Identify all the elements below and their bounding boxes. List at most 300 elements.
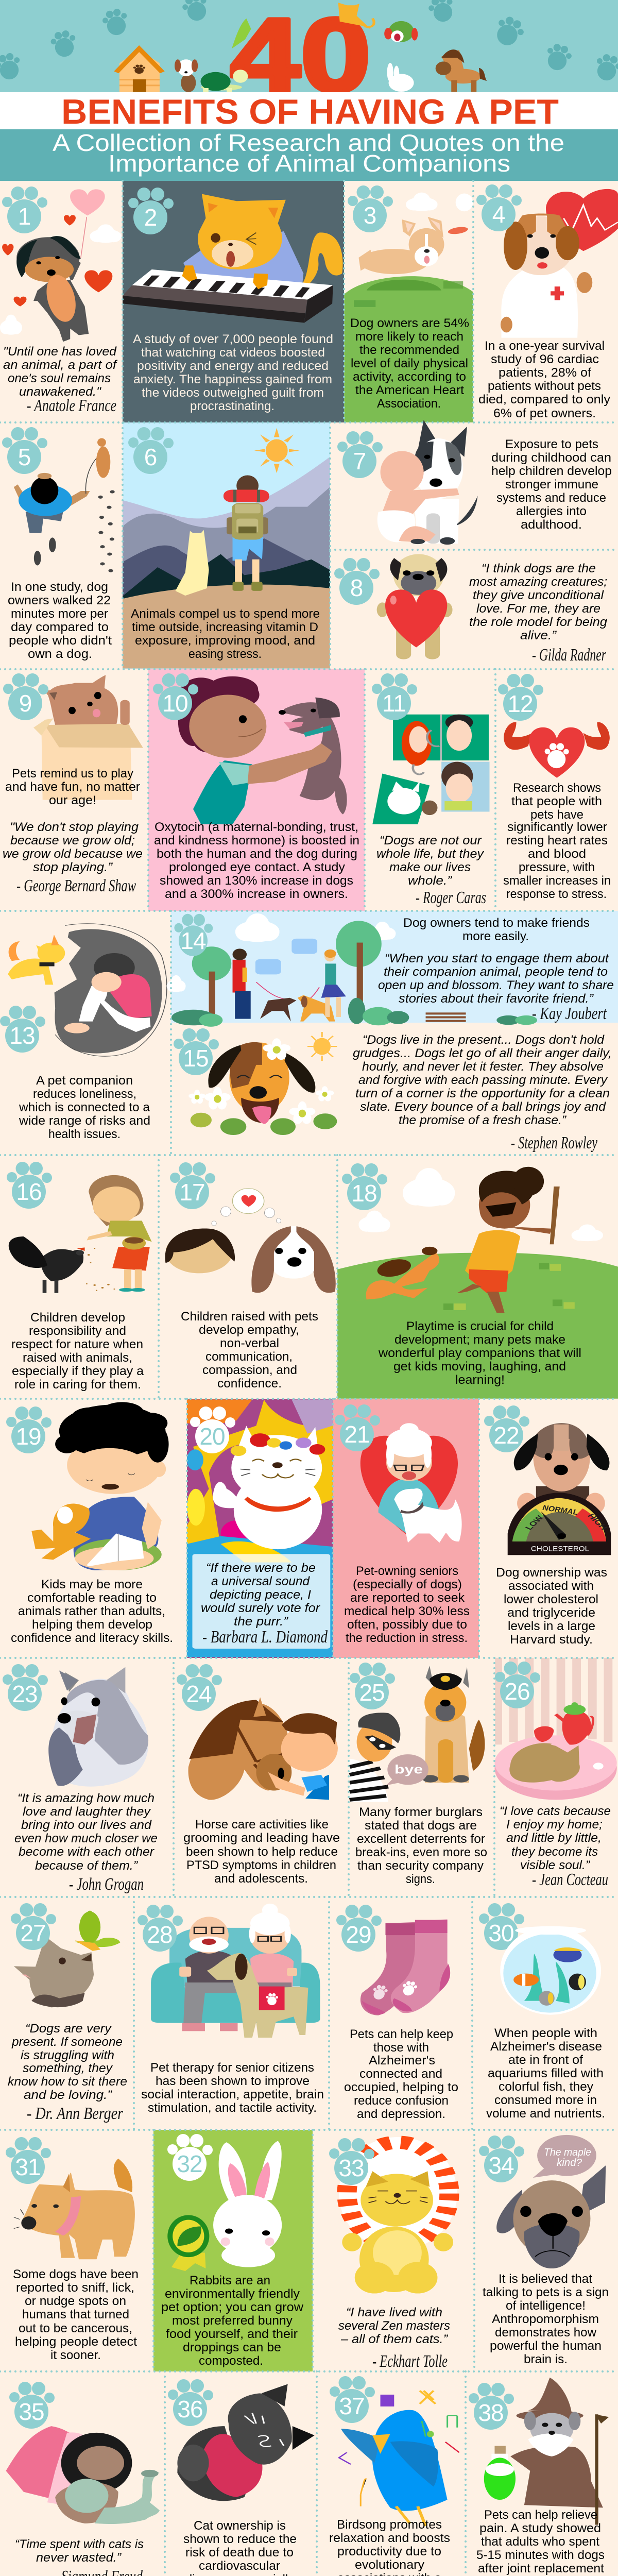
panel 23: John Grogan quote bbox=[3, 1664, 158, 1894]
body text: compassion, and bbox=[202, 1363, 297, 1377]
body text bbox=[13, 2267, 139, 2362]
panel 16: responsibility bbox=[7, 1162, 152, 1392]
panel 4: cardiac survival bbox=[476, 184, 618, 420]
badge 34 bbox=[479, 2136, 524, 2182]
quote text: stop playing.” bbox=[33, 860, 113, 874]
body text: volume and nutrients. bbox=[486, 2107, 605, 2121]
body text: easing stress. bbox=[188, 647, 262, 661]
panel 36: cat ownership bbox=[168, 2379, 315, 2576]
panel 5: dog walking bbox=[2, 427, 115, 661]
body text: the reduction in stress. bbox=[346, 1631, 468, 1645]
body text: systems and reduce bbox=[496, 491, 606, 505]
badge 14: 14 bbox=[180, 927, 206, 954]
badge 26: 26 bbox=[504, 1678, 530, 1705]
body text: social interaction, appetite, brain bbox=[141, 2088, 324, 2102]
body text: Kids may be more bbox=[41, 1578, 143, 1591]
body text: activity, according to bbox=[353, 370, 466, 384]
body text: consumed more in bbox=[494, 2093, 597, 2107]
illustration: boy reading to cat bbox=[31, 1402, 169, 1570]
quote text: - John Grogan bbox=[69, 1875, 144, 1894]
panel 10: oxytocin bbox=[148, 669, 365, 911]
body text: procrastinating. bbox=[190, 399, 274, 413]
badge 20 bbox=[190, 1406, 235, 1453]
badge 27 bbox=[11, 1903, 56, 1950]
body text: time outside, increasing vitamin D bbox=[132, 620, 318, 634]
badge 7: 7 bbox=[353, 448, 366, 474]
badge 21 bbox=[335, 1404, 380, 1451]
badge 25: 25 bbox=[359, 1679, 385, 1706]
body text bbox=[183, 2519, 297, 2576]
body text: stronger immune bbox=[505, 478, 598, 492]
body text: out to be cancerous, bbox=[19, 2321, 132, 2335]
quote text: because of them.” bbox=[35, 1859, 138, 1873]
body text bbox=[403, 916, 590, 943]
body text bbox=[486, 2026, 605, 2121]
illustration: fishbowl bbox=[500, 1926, 601, 2015]
body text: reported to sniff, lick, bbox=[16, 2281, 134, 2295]
badge 34: 34 bbox=[488, 2152, 514, 2179]
quote text: know how to sit there bbox=[8, 2075, 127, 2089]
subtitle line 2: Importance of Animal Companions bbox=[108, 150, 510, 177]
quote text bbox=[3, 345, 117, 415]
body text: communication, bbox=[205, 1350, 293, 1364]
body text: during childhood can bbox=[491, 451, 611, 465]
quote text: “I love cats because bbox=[500, 1804, 611, 1818]
body text: reduces loneliness, bbox=[33, 1087, 136, 1101]
body text: our age! bbox=[49, 793, 96, 807]
badge 32: 32 bbox=[177, 2150, 202, 2177]
body text: colorful fish, they bbox=[499, 2080, 593, 2094]
body text bbox=[355, 1805, 487, 1886]
badge 22: 22 bbox=[493, 1422, 519, 1449]
body text: Pets can help keep bbox=[350, 2027, 453, 2041]
quote text bbox=[201, 1561, 328, 1647]
body text: Rabbits are an bbox=[190, 2274, 270, 2287]
panel 20: Barbara Diamond quote bbox=[187, 1399, 333, 1658]
quote text bbox=[469, 562, 608, 665]
body text: pets have bbox=[530, 808, 583, 822]
body text: more easily. bbox=[462, 929, 529, 943]
body text: pain. A study showed bbox=[479, 2521, 601, 2535]
quote text: and be loving.” bbox=[24, 2088, 112, 2102]
body text: ate in front of bbox=[508, 2053, 583, 2067]
body text: confidence. bbox=[217, 1377, 282, 1391]
body text: study of 96 cardiac bbox=[491, 352, 599, 366]
speech bubble text: The maple bbox=[544, 2147, 591, 2158]
body text: especially if they play a bbox=[12, 1364, 144, 1378]
illustration: singing bluebird with notes bbox=[339, 2391, 459, 2526]
illustration: black cat hugging a heart bbox=[177, 2384, 315, 2501]
body text bbox=[344, 1564, 470, 1645]
quote text bbox=[500, 1804, 611, 1889]
body text: Playtime is crucial for child bbox=[406, 1319, 554, 1333]
body text: develop empathy, bbox=[199, 1323, 299, 1337]
badge 25 bbox=[350, 1663, 395, 1709]
badge 29 bbox=[336, 1905, 382, 1952]
quote text: “Time spent with cats is bbox=[15, 2537, 144, 2551]
panel 37: birdsong bbox=[329, 2376, 459, 2576]
badge 6: 6 bbox=[144, 444, 157, 470]
quote text: - Dr. Ann Berger bbox=[27, 2104, 124, 2123]
quote text: and little by little, bbox=[506, 1831, 602, 1845]
badge 13 bbox=[0, 1006, 45, 1053]
badge 8 bbox=[334, 558, 380, 605]
body text: Dog ownership was bbox=[496, 1566, 607, 1580]
body text: the recommended bbox=[359, 343, 459, 357]
body text: connected and bbox=[359, 2067, 442, 2081]
illustration: park with two dog walkers bbox=[167, 913, 537, 1027]
body text: associated with bbox=[508, 1579, 594, 1593]
body text: medical help 30% less bbox=[344, 1604, 470, 1618]
quote text: several Zen masters bbox=[338, 2319, 450, 2333]
body text: resting heart rates bbox=[506, 834, 608, 848]
quote text: “Dogs live in the present... Dogs don't hold bbox=[363, 1033, 605, 1047]
body text: talking to pets is a sign bbox=[483, 2285, 609, 2299]
body text: levels in a large bbox=[508, 1619, 595, 1633]
quote text: they become its bbox=[511, 1845, 598, 1859]
badge 32 bbox=[167, 2134, 213, 2181]
body text: prolonged eye contact. A study bbox=[169, 860, 345, 874]
quote text: – all of them cats.” bbox=[340, 2332, 448, 2346]
illustration: burglar and police dog bbox=[350, 1666, 485, 1802]
quote text: the promise of a fresh chase.” bbox=[399, 1113, 566, 1127]
quote text: because we grow old; bbox=[10, 834, 135, 848]
quote text: most amazing creatures; bbox=[469, 575, 607, 589]
quote text: never wasted.” bbox=[36, 2551, 122, 2565]
panel 34: talking to pets bbox=[479, 2135, 609, 2366]
quote text: - Anatole France bbox=[27, 396, 116, 415]
body text: day compared to bbox=[11, 620, 109, 634]
body text: Anthropomorphism bbox=[492, 2312, 599, 2326]
quote text: depicting peace, I bbox=[210, 1588, 311, 1602]
badge 33 bbox=[329, 2138, 374, 2185]
big number 40: 40 bbox=[230, 0, 371, 114]
body text: and blood bbox=[528, 847, 586, 861]
body text: aquariums filled with bbox=[488, 2066, 604, 2080]
badge 24 bbox=[177, 1664, 222, 1711]
quote text: “When you start to engage them about bbox=[385, 952, 609, 965]
body text bbox=[350, 316, 469, 411]
badge 37 bbox=[330, 2376, 375, 2423]
title band bbox=[0, 92, 618, 129]
body text: It is believed that bbox=[499, 2272, 592, 2286]
quote text: “Dogs are not our bbox=[380, 834, 482, 848]
body text: cardiovascular bbox=[199, 2559, 280, 2573]
panel 28: pet therapy bbox=[138, 1904, 324, 2115]
badge 14 bbox=[174, 914, 213, 956]
body text: lower cholesterol bbox=[504, 1592, 598, 1606]
body text: powerful the human bbox=[490, 2339, 602, 2353]
panel 21: seniors bbox=[333, 1399, 479, 1658]
body text: break-ins, even more so bbox=[355, 1845, 487, 1859]
body text: role in caring for them. bbox=[14, 1378, 141, 1392]
quote text: whole.” bbox=[408, 874, 452, 888]
body text: brain is. bbox=[524, 2352, 568, 2366]
quote text: is struggling with bbox=[21, 2048, 114, 2062]
body text bbox=[491, 437, 612, 532]
body text: pressure, with bbox=[519, 860, 595, 874]
body text: In a one-year survival bbox=[485, 339, 605, 353]
badge 9 bbox=[3, 673, 48, 720]
body text: helping them develop bbox=[32, 1618, 152, 1632]
badge 15: 15 bbox=[183, 1045, 209, 1072]
body text: development; many pets make bbox=[394, 1333, 565, 1347]
quote text: - George Bernard Shaw bbox=[16, 876, 136, 895]
badge 35 bbox=[9, 2382, 55, 2429]
quote text: “I have lived with bbox=[346, 2306, 442, 2319]
body text: respect for nature when bbox=[11, 1337, 143, 1351]
illustration: dog behind cholesterol gauge: NORMAL bbox=[541, 1503, 579, 1516]
subtitle band bbox=[0, 129, 618, 181]
body text: productivity due to bbox=[337, 2545, 441, 2558]
quote text: turn of a corner is the opportunity for a clean bbox=[355, 1087, 610, 1100]
quote text: present. If someone bbox=[11, 2035, 123, 2049]
body text: signs. bbox=[406, 1872, 435, 1886]
badge 11: 11 bbox=[382, 690, 406, 717]
quote text: “I think dogs are the bbox=[482, 562, 596, 575]
panel 15: Stephen Rowley quote bbox=[174, 1028, 612, 1153]
body text: Children develop bbox=[30, 1311, 125, 1325]
quote text: “Dogs are very bbox=[25, 2022, 112, 2036]
badge 36: 36 bbox=[177, 2396, 203, 2422]
badge 7 bbox=[337, 431, 383, 478]
body text: people who didn't bbox=[9, 634, 112, 648]
body text: died, compared to only bbox=[478, 393, 610, 406]
badge 6 bbox=[128, 427, 174, 474]
badge 24: 24 bbox=[186, 1681, 212, 1707]
body text: environmentally friendly bbox=[165, 2287, 300, 2301]
body text: allergies into bbox=[516, 504, 587, 518]
illustration: lucky cat with flower crown bbox=[187, 1399, 333, 1657]
panel 17: empathy bbox=[165, 1162, 336, 1391]
quote text: alive.” bbox=[520, 629, 557, 642]
body text: which is connected to a bbox=[19, 1100, 150, 1114]
body text bbox=[11, 1578, 173, 1645]
body text: shown to reduce the bbox=[183, 2532, 297, 2546]
body text: Dog owners are 54% bbox=[350, 316, 469, 330]
body text: Some dogs have been bbox=[13, 2267, 139, 2281]
panel 18: playtime bbox=[337, 1163, 618, 1399]
quote text bbox=[376, 834, 486, 907]
illustration: pink socks bbox=[360, 1920, 450, 2015]
body text: grooming and leading have bbox=[183, 1831, 340, 1845]
illustration: cat in box bbox=[33, 675, 143, 800]
body text: showed an 130% increase in dogs bbox=[160, 874, 353, 888]
badge 3: 3 bbox=[364, 202, 376, 229]
quote text: unawakened." bbox=[19, 385, 102, 399]
panel 22: cholesterol bbox=[484, 1405, 611, 1647]
body text: occupied, helping to bbox=[344, 2080, 458, 2094]
illustration: child and beagle with heart thought bbox=[165, 1189, 336, 1293]
quote text bbox=[3, 820, 143, 895]
quote text: stories about their favorite friend.” bbox=[399, 992, 594, 1006]
illustration: girl and dog playing on hill bbox=[337, 1167, 618, 1399]
quote text: grudges... Dogs let go of all their anger daily, bbox=[353, 1046, 612, 1060]
panel 29: Alzheimer's bbox=[336, 1905, 458, 2121]
body text bbox=[496, 1566, 607, 1647]
body text: it sooner. bbox=[50, 2348, 101, 2362]
body text: Pets remind us to play bbox=[12, 767, 133, 781]
badge 18: 18 bbox=[351, 1180, 377, 1207]
quote text: - Barbara L. Diamond bbox=[202, 1628, 328, 1647]
illustration: dog behind cholesterol gauge: HIGH bbox=[585, 1513, 609, 1531]
header: title banner bbox=[0, 0, 618, 181]
quote text: love. For me, they are bbox=[476, 602, 600, 616]
quote text: open up and blossom. They want to share bbox=[378, 978, 614, 992]
body text: comfortable reading to bbox=[27, 1591, 157, 1605]
body text: been shown to help reduce bbox=[186, 1845, 338, 1859]
body text bbox=[154, 820, 359, 901]
illustration: dog and butterfly bbox=[14, 1911, 120, 2007]
illustration: husky bbox=[48, 1667, 148, 1787]
quote text: bring into our lives and bbox=[21, 1818, 152, 1832]
illustration: grandma with dog in red chair bbox=[360, 1423, 462, 1543]
body text: and a 300% increase in owners. bbox=[165, 887, 348, 901]
quote text: would surely vote for bbox=[201, 1601, 320, 1615]
quote text: visible soul.” bbox=[520, 1858, 590, 1872]
quote text: slate. Every bounce of a ball brings joy and bbox=[360, 1100, 606, 1114]
quote text: whole life, but they bbox=[376, 847, 485, 861]
body text: owners walked 22 bbox=[8, 594, 111, 607]
body text: In one study, dog bbox=[11, 580, 108, 594]
panel 32: rabbits bbox=[153, 2130, 313, 2371]
illustration: woman hugging cat bbox=[6, 2426, 160, 2524]
body text: Harvard study. bbox=[510, 1633, 593, 1647]
body text bbox=[133, 332, 333, 413]
body text bbox=[183, 1818, 340, 1886]
body text bbox=[8, 580, 112, 661]
body text: evolutionary bbox=[355, 2558, 424, 2572]
badge 2 bbox=[128, 188, 174, 234]
panel 12: heart rates bbox=[498, 674, 611, 901]
badge 12: 12 bbox=[507, 690, 533, 717]
quote text: an animal, a part of bbox=[3, 358, 117, 372]
panel 11: Roger Caras quote bbox=[372, 673, 490, 907]
illustration: sniffing dog bbox=[14, 2159, 135, 2259]
badge 28 bbox=[138, 1905, 183, 1952]
illustration: dog behind cholesterol gauge: CHOLESTEROL bbox=[531, 1545, 589, 1553]
quote text: one's soul remains bbox=[8, 371, 111, 385]
quote text: "Until one has loved bbox=[3, 345, 117, 359]
quote text: “If there were to be bbox=[206, 1561, 316, 1575]
badge 19 bbox=[6, 1406, 52, 1453]
body text: and depression. bbox=[357, 2107, 445, 2121]
body text: adulthood. bbox=[521, 518, 582, 532]
body text: has been shown to improve bbox=[156, 2074, 310, 2088]
illustration: happy dog with flowers bbox=[188, 1032, 337, 1135]
panel 25: burglars bbox=[350, 1663, 487, 1886]
badge 38 bbox=[469, 2383, 514, 2430]
body text: positivity and energy and reduced bbox=[137, 359, 329, 373]
body text: the videos outweighed guilt from bbox=[142, 386, 324, 400]
body text bbox=[181, 1310, 318, 1391]
illustration: meditating cat with sunburst bbox=[339, 2137, 457, 2294]
quote text: - Roger Caras bbox=[416, 888, 486, 907]
panel 38: pain relief bbox=[469, 2378, 609, 2576]
body text: A pet companion bbox=[36, 1074, 133, 1088]
quote text: - Eckhart Tolle bbox=[372, 2352, 448, 2371]
badge 1 bbox=[2, 187, 47, 233]
quote text bbox=[15, 2537, 144, 2576]
illustration: girl feeding chicken bbox=[9, 1175, 152, 1293]
badge 18 bbox=[342, 1163, 387, 1210]
illustration: elderly couple with service dog on sofa bbox=[151, 1904, 320, 2038]
badge 31: 31 bbox=[15, 2154, 41, 2180]
body text: stated that dogs are bbox=[365, 1819, 477, 1833]
body text: smaller increases in bbox=[503, 874, 611, 888]
panel 13: loneliness bbox=[0, 924, 167, 1141]
badge 23 bbox=[3, 1664, 48, 1711]
panel 8: Gilda Radner quote bbox=[334, 554, 608, 665]
body text: wide range of risks and bbox=[19, 1114, 150, 1128]
body text: A study of over 7,000 people found bbox=[133, 332, 333, 346]
badge 33: 33 bbox=[338, 2155, 364, 2181]
body text: Cat ownership is bbox=[194, 2519, 286, 2533]
badge 30: 30 bbox=[488, 1920, 514, 1946]
body text bbox=[344, 2027, 458, 2121]
body text: that people with bbox=[511, 794, 602, 808]
body text: help children develop bbox=[491, 464, 612, 478]
panel 33: Eckhart Tolle quote bbox=[329, 2137, 457, 2371]
quote text: hourly, and never let it fester. They absolve bbox=[362, 1060, 604, 1074]
body text: helping people detect bbox=[15, 2335, 137, 2349]
quote text bbox=[378, 952, 614, 1023]
body text: Pet therapy for senior citizens bbox=[150, 2061, 314, 2075]
badge 5: 5 bbox=[18, 444, 30, 470]
badge 27: 27 bbox=[20, 1920, 46, 1946]
body text bbox=[478, 339, 610, 420]
badge 3 bbox=[348, 185, 393, 232]
panel 24: horse care bbox=[177, 1664, 340, 1886]
quote text: become with each other bbox=[19, 1845, 154, 1859]
badge 35: 35 bbox=[19, 2398, 44, 2425]
illustration: pug with heart bbox=[377, 554, 453, 659]
illustration: cat at keyboard bbox=[123, 194, 343, 323]
badge 13: 13 bbox=[9, 1022, 35, 1049]
body text bbox=[161, 2274, 304, 2368]
body text: those with bbox=[373, 2041, 429, 2055]
body text: Many former burglars bbox=[359, 1805, 483, 1819]
body text: stimulation, and tactile activity. bbox=[148, 2101, 317, 2115]
body text: level of daily physical bbox=[351, 357, 468, 370]
quote text: love and laughter they bbox=[23, 1805, 151, 1819]
body text: health issues. bbox=[48, 1127, 121, 1141]
body text: and kindness hormone) is boosted in bbox=[154, 834, 359, 848]
panel 19: reading to animals bbox=[6, 1402, 173, 1645]
quote text: even how much closer we bbox=[14, 1832, 158, 1845]
badge 1: 1 bbox=[18, 203, 30, 230]
body text: Research shows bbox=[513, 781, 601, 795]
badge 16: 16 bbox=[16, 1178, 42, 1205]
speech bubble text bbox=[544, 2147, 591, 2168]
speech bubble text: kind? bbox=[557, 2157, 582, 2168]
illustration: boy lifting dog bbox=[177, 676, 347, 824]
body text: that watching cat videos boosted bbox=[141, 346, 325, 360]
body text: droppings can be bbox=[183, 2341, 281, 2354]
body text: Pet-owning seniors bbox=[356, 1564, 458, 1578]
body text: Pets can help relieve bbox=[484, 2508, 597, 2522]
body text: exposure, improving mood, and bbox=[135, 634, 315, 648]
badge 19: 19 bbox=[15, 1423, 41, 1450]
title: benefits: BENEFITS OF HAVING A PET bbox=[61, 92, 559, 131]
badge 10 bbox=[153, 673, 198, 720]
body text: excellent deterrents for bbox=[357, 1832, 485, 1846]
quote text: and forgive with each passing minute. Every bbox=[358, 1073, 608, 1087]
badge 38: 38 bbox=[478, 2399, 504, 2426]
illustration: dog behind cholesterol gauge bbox=[508, 1423, 611, 1555]
illustration: dog with balloon bbox=[0, 189, 122, 342]
badge 16 bbox=[7, 1162, 52, 1209]
